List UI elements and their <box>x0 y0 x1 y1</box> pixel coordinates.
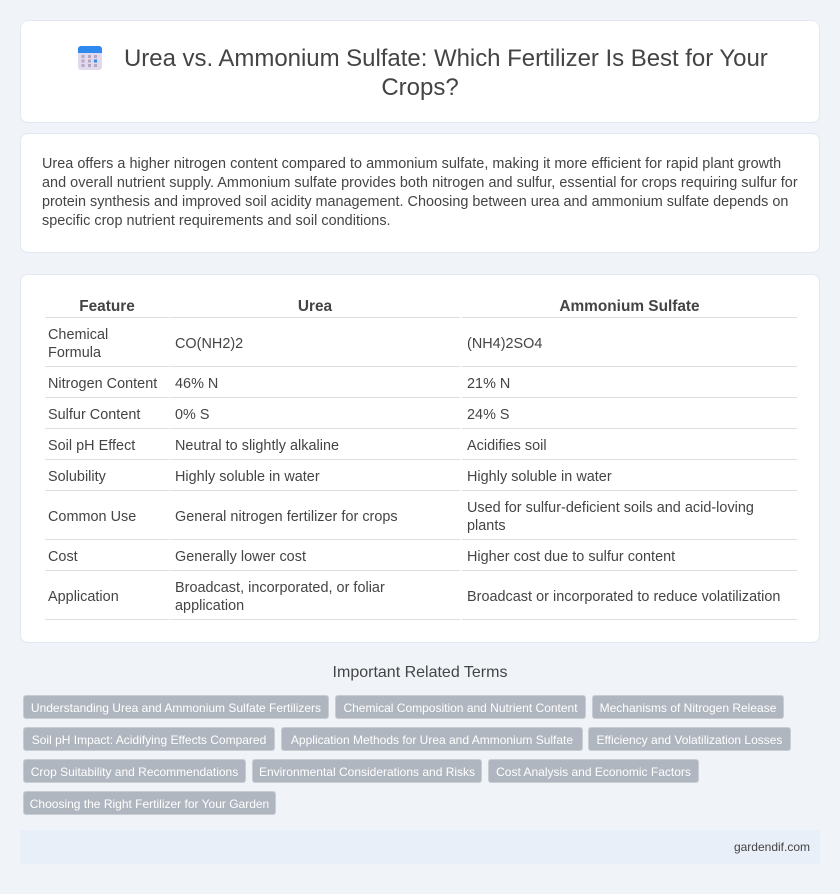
panel: introduction <box>20 133 820 253</box>
cell: urea formula: CO(NH2)2 <box>175 336 243 352</box>
header: Ammonium Sulfate: Ammonium Sulfate <box>559 298 700 315</box>
row: Chemical Formula: Formula <box>48 345 101 361</box>
cell: ammonium sulfate application: Broadcast or incorporated to reduce volatilization <box>467 589 780 605</box>
cell: ammonium sulfate nitrogen: 21% N <box>467 376 510 392</box>
cell: ammonium sulfate use: plants <box>467 518 506 534</box>
title <box>124 45 768 101</box>
footer source: gardendif.com <box>734 840 810 854</box>
cell: ammonium sulfate formula: (NH4)2SO4 <box>467 336 542 352</box>
title: Urea vs. Ammonium Sulfate: Which Fertilizer Is Best for Your <box>124 45 768 72</box>
intro text: protein synthesis and improved soil acidity management. Choosing between urea and ammonium sulfate depends on <box>42 194 788 210</box>
row: Solubility: Solubility <box>48 469 106 485</box>
heading: related terms: Important Related Terms <box>333 664 507 681</box>
row: Soil pH Effect: Soil pH Effect <box>48 438 135 454</box>
cell: ammonium sulfate sulfur: 24% S <box>467 407 510 423</box>
cell: urea application <box>175 580 385 614</box>
footer bar <box>20 830 820 864</box>
row: Chemical Formula: Chemical <box>48 327 108 343</box>
header: Urea: Urea <box>298 298 332 315</box>
cell: urea application: Broadcast, incorporated, or foliar <box>175 580 385 596</box>
cell: urea nitrogen: 46% N <box>175 376 218 392</box>
row: Sulfur Content: Sulfur Content <box>48 407 140 423</box>
cell: ammonium sulfate use: Used for sulfur-deficient soils and acid-loving <box>467 500 754 516</box>
tag: Application Methods for Urea and Ammonium Sulfate <box>291 733 573 747</box>
cell: urea use: General nitrogen fertilizer for crops <box>175 509 398 525</box>
icon: calendar <box>78 46 102 70</box>
row: Application: Application <box>48 589 119 605</box>
cell: urea pH: Neutral to slightly alkaline <box>175 438 339 454</box>
comparison table headers <box>79 298 700 315</box>
tag: Choosing the Right Fertilizer for Your Garden <box>30 797 269 811</box>
tag: Efficiency and Volatilization Losses <box>597 733 782 747</box>
intro text: and overall nutrient supply. Ammonium sulfate provides both nitrogen and sulfur, essential for crops requiring sulfur for <box>42 175 798 191</box>
tag <box>23 791 276 815</box>
row: Common Use: Common Use <box>48 509 136 525</box>
cell: urea sulfur: 0% S <box>175 407 210 423</box>
cell: urea solubility: Highly soluble in water <box>175 469 320 485</box>
cell: ammonium sulfate use <box>467 500 754 534</box>
intro text <box>42 156 798 229</box>
tag: Crop Suitability and Recommendations <box>31 765 238 779</box>
tag <box>252 759 482 783</box>
intro text: Urea offers a higher nitrogen content compared to ammonium sulfate, making it more efficient for rapid plant growth <box>42 156 781 172</box>
tag <box>588 727 791 751</box>
header: Feature: Feature <box>79 298 135 315</box>
tag <box>488 759 699 783</box>
intro text: specific crop nutrient requirements and soil conditions. <box>42 213 391 229</box>
row: Chemical Formula <box>48 327 108 361</box>
tag: Understanding Urea and Ammonium Sulfate Fertilizers <box>31 701 321 715</box>
panel: title header <box>20 20 820 123</box>
cell: ammonium sulfate cost: Higher cost due to sulfur content <box>467 549 675 565</box>
tag: Soil pH Impact: Acidifying Effects Compared <box>32 733 266 747</box>
tag: Chemical Composition and Nutrient Content <box>343 701 578 715</box>
cell: ammonium sulfate solubility: Highly soluble in water <box>467 469 612 485</box>
cell: ammonium sulfate pH: Acidifies soil <box>467 438 547 454</box>
tag <box>592 695 784 719</box>
row: Cost: Cost <box>48 549 78 565</box>
row: Nitrogen Content: Nitrogen Content <box>48 376 157 392</box>
tag: Cost Analysis and Economic Factors <box>496 765 691 779</box>
term tags <box>23 695 791 815</box>
tag <box>23 759 246 783</box>
cell: urea application: application <box>175 598 244 614</box>
tag <box>23 695 329 719</box>
tag: Mechanisms of Nitrogen Release <box>600 701 776 715</box>
title: Crops? <box>381 74 459 101</box>
tag: Environmental Considerations and Risks <box>259 765 475 779</box>
tag <box>335 695 586 719</box>
panel: comparison table <box>20 274 820 643</box>
tag <box>23 727 275 751</box>
cell: urea cost: Generally lower cost <box>175 549 306 565</box>
tag <box>281 727 583 751</box>
